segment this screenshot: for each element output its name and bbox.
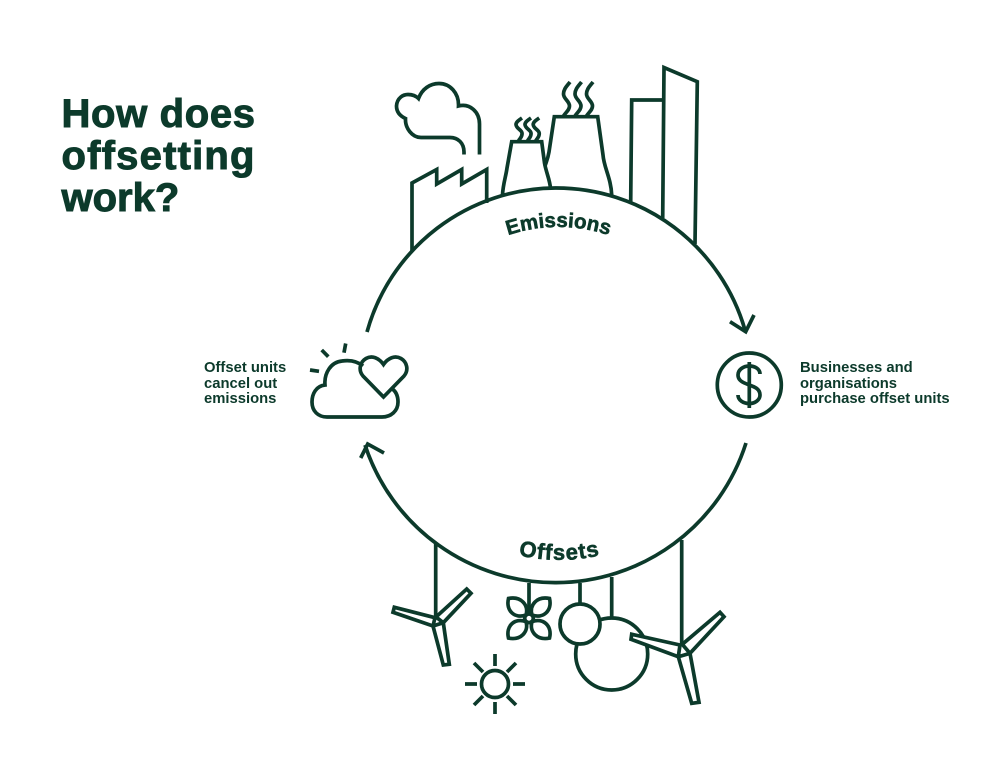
text: businesses purchase offset units bbox=[800, 360, 950, 407]
text: businesses purchase offset units: Businesses and bbox=[800, 360, 913, 376]
cycle arc: emissions bbox=[367, 188, 754, 332]
icon: office towers bbox=[631, 68, 697, 244]
icon: wind turbine left bbox=[393, 543, 471, 665]
icon: large cooling tower bbox=[545, 82, 612, 195]
icon: wind turbine right bbox=[631, 540, 724, 703]
cycle arc: offsets bbox=[361, 443, 746, 583]
icon: smoke cloud bbox=[396, 84, 480, 154]
title bbox=[60, 92, 256, 220]
text: businesses purchase offset units: purchase offset units bbox=[800, 391, 950, 407]
icon: cloud with heart and sun rays bbox=[310, 344, 407, 417]
text: businesses purchase offset units: organisations bbox=[800, 376, 897, 392]
icon: flower bbox=[508, 583, 550, 639]
text: offset units cancel out emissions: cancel out bbox=[204, 376, 277, 392]
title: How does bbox=[62, 92, 256, 136]
icon: small cooling tower bbox=[502, 118, 550, 195]
label: Offsets: Offsets bbox=[520, 541, 598, 560]
text: offset units cancel out emissions: Offset units bbox=[204, 360, 286, 376]
text: offset units cancel out emissions: emissions bbox=[204, 391, 276, 407]
title: work? bbox=[62, 176, 179, 220]
icon: dollar coin bbox=[717, 353, 781, 417]
title: offsetting bbox=[62, 134, 256, 178]
icon: factory bbox=[412, 170, 487, 251]
label: Emissions: Emissions bbox=[505, 212, 610, 236]
text: offset units cancel out emissions bbox=[204, 360, 286, 407]
icon: small circle bbox=[560, 583, 600, 644]
icon: sun bbox=[465, 654, 525, 714]
icon: large circle bbox=[576, 577, 648, 690]
